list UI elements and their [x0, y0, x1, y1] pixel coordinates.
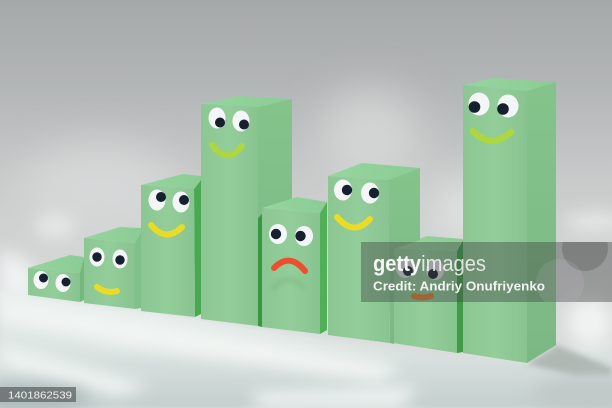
bar 1: smallest bar	[28, 255, 84, 302]
bar 3: third happy bar	[141, 174, 201, 317]
mouth	[414, 296, 431, 298]
bar 7: bar with orange mouth	[393, 236, 463, 353]
floor with light streaks	[0, 292, 612, 408]
bar 5: sad bar	[262, 197, 327, 334]
watermark band	[361, 242, 612, 302]
image id label	[0, 387, 76, 402]
eyes	[90, 248, 128, 268]
bar 4: tall happy bar	[201, 96, 292, 327]
eyes	[396, 258, 444, 280]
bar 6: medium happy bar	[328, 163, 420, 344]
eyes	[269, 224, 313, 246]
smile	[212, 145, 242, 155]
mouth	[97, 287, 117, 292]
image id label: 1401862539	[8, 390, 72, 402]
eyes	[34, 271, 70, 292]
smile	[473, 131, 511, 141]
eyes	[468, 92, 518, 118]
watermark logo text: gettyimages	[373, 251, 486, 276]
frown	[274, 261, 305, 271]
eyes	[148, 190, 190, 212]
eyes	[208, 108, 250, 132]
watermark credit text: Credit: Andriy Onufriyenko	[373, 280, 545, 294]
frown shadow	[272, 279, 304, 290]
smile	[151, 225, 182, 235]
eyes	[334, 180, 379, 204]
smile	[337, 217, 370, 228]
bar 2: second small bar	[84, 227, 141, 309]
bar 8: tallest happy bar, right	[463, 78, 556, 363]
